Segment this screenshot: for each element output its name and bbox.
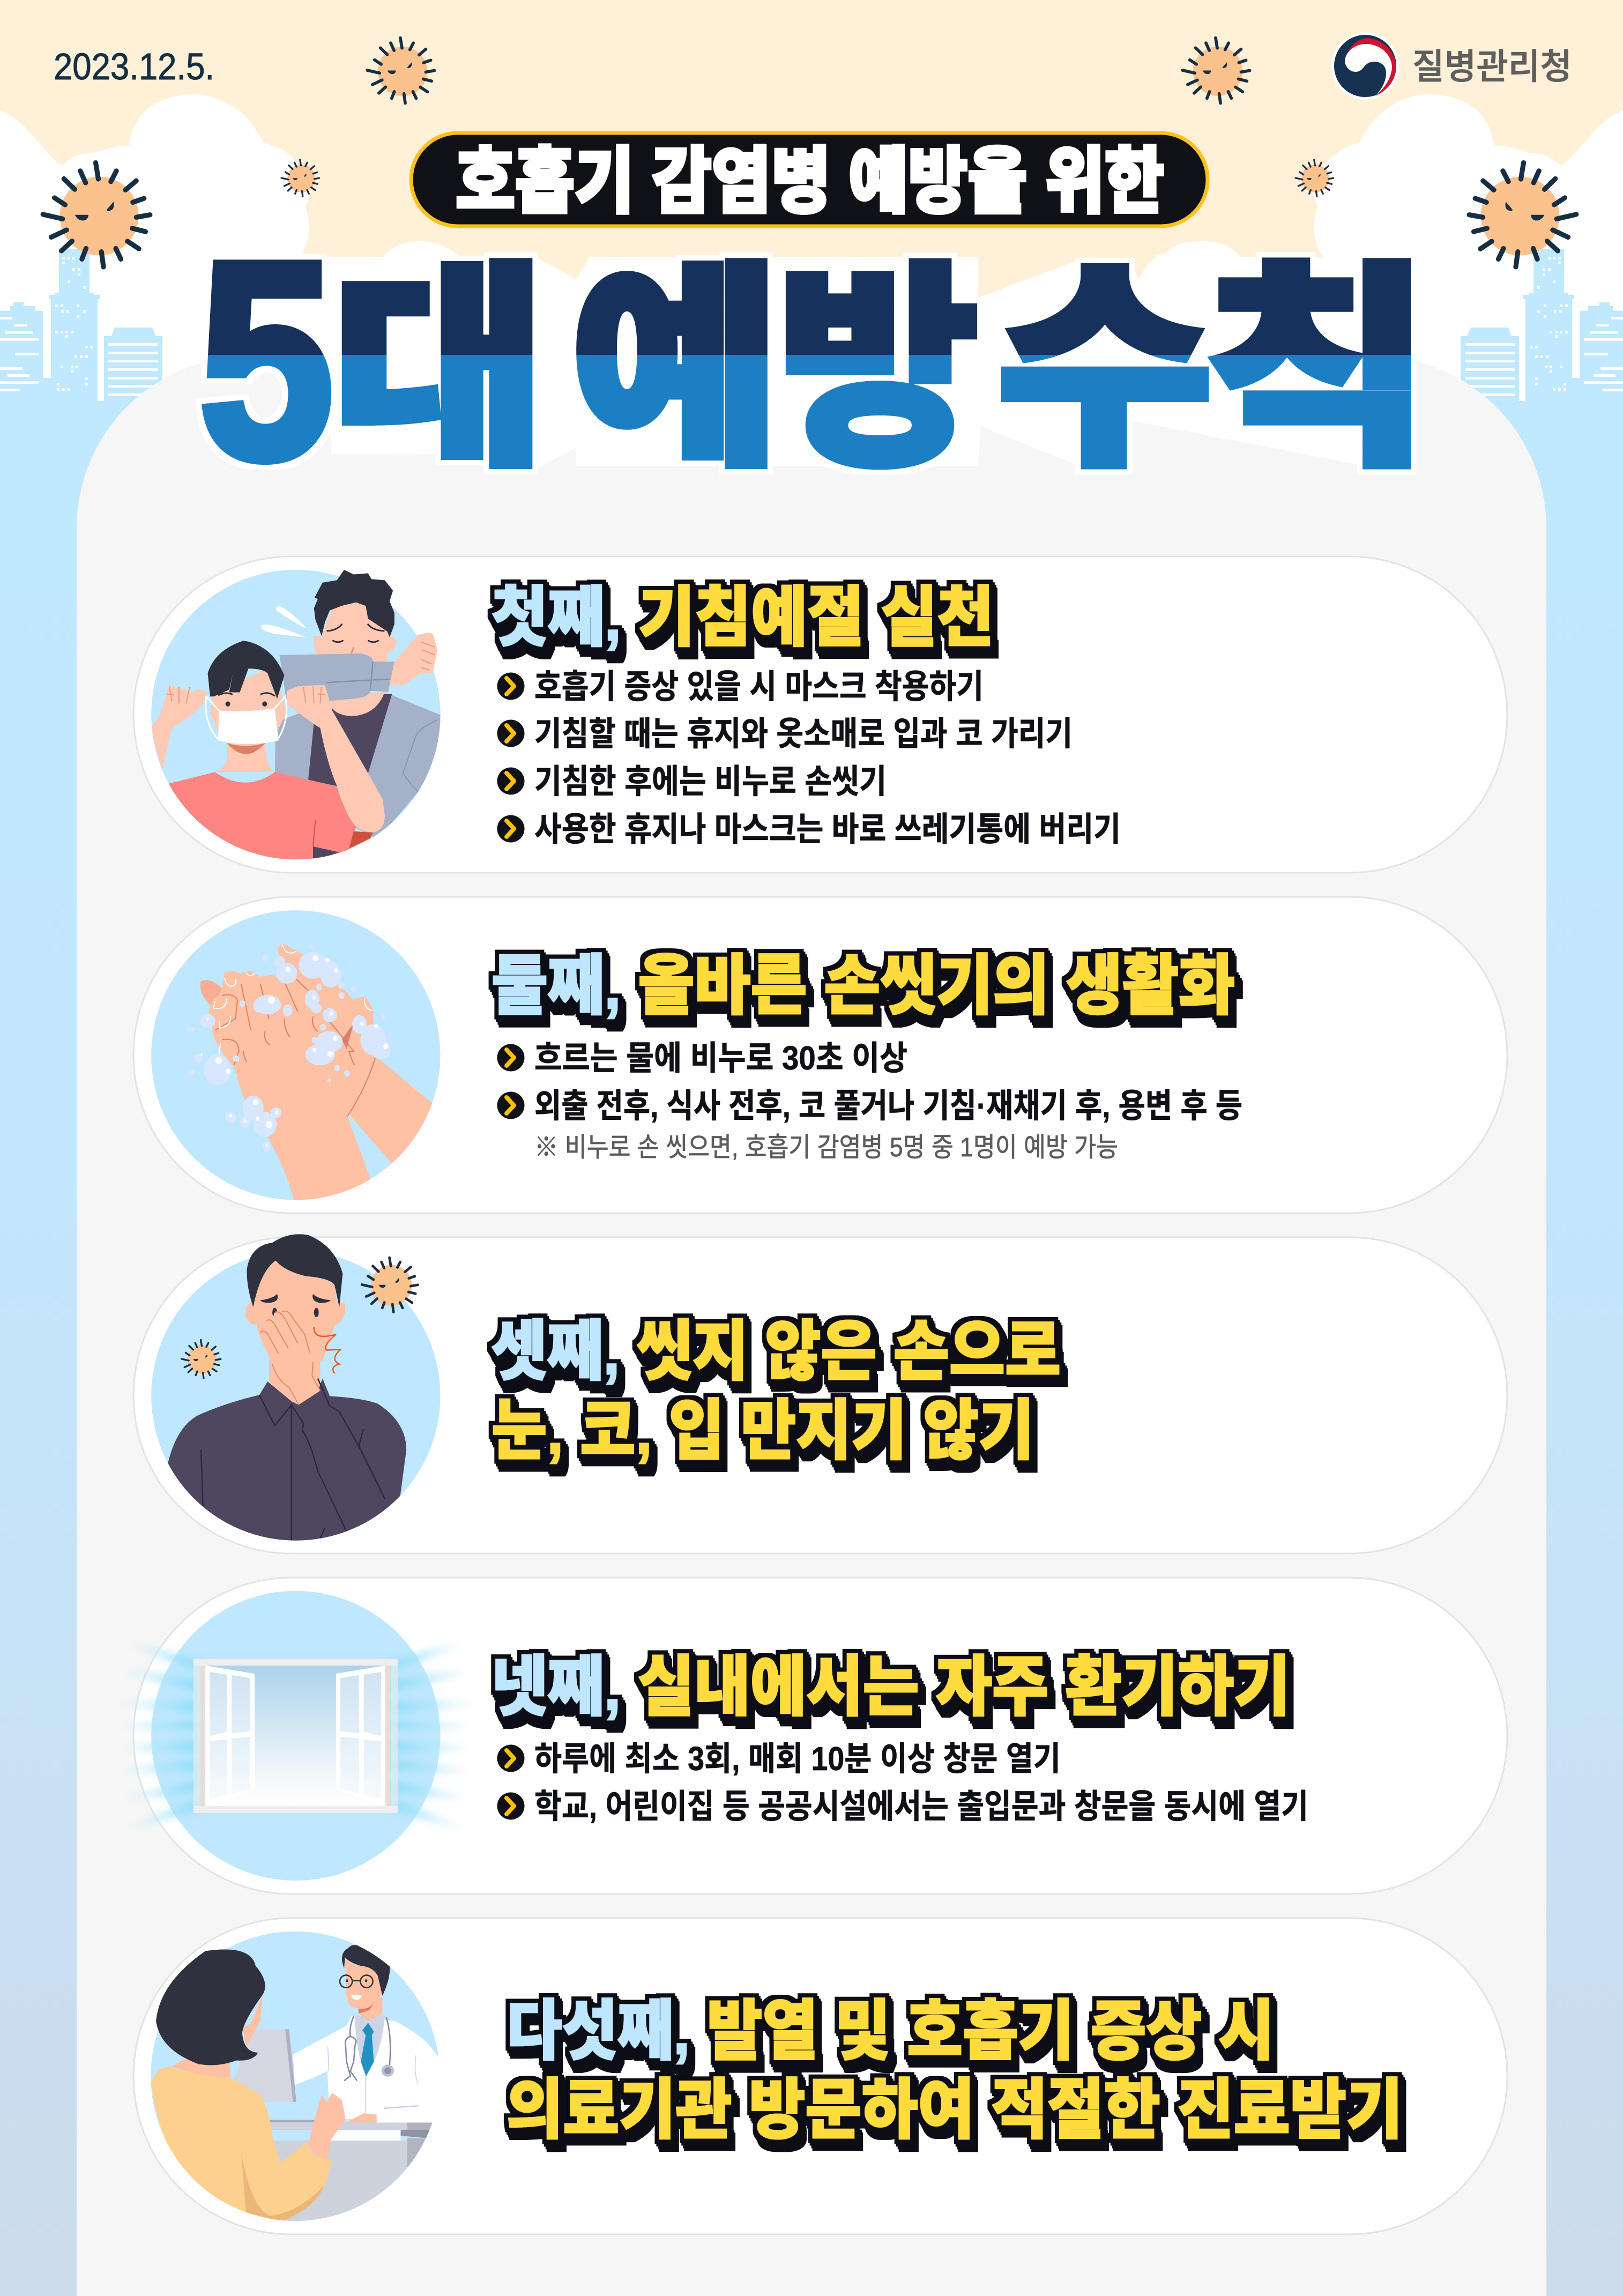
board <box>227 2029 295 2102</box>
heading line 2: 눈, 코, 입 만지기 않기 <box>492 1394 1034 1467</box>
heading: 첫째, 기침예절 실천 <box>492 581 994 654</box>
virus small left <box>281 160 319 196</box>
heading: 둘째, 올바른 손씻기의 생활화 <box>492 949 1235 1022</box>
virus small right <box>1296 160 1333 196</box>
virus top right <box>1182 38 1250 103</box>
agency name: 질병관리청 <box>1412 47 1572 86</box>
bullet list: 호흡기 증상 있을 시 마스크 착용하기 <box>534 668 984 705</box>
panel: second rule <box>133 897 1507 1213</box>
city skyline left <box>0 249 162 407</box>
patient top <box>151 2067 331 2222</box>
doctor <box>293 2016 442 2119</box>
patient arm <box>308 2093 346 2160</box>
bullet list: 기침한 후에는 비누로 손씻기 <box>534 763 887 800</box>
desk <box>270 2122 433 2130</box>
bullet list: 기침할 때는 휴지와 옷소매로 입과 코 가리기 <box>534 716 1073 753</box>
main title: 수 <box>996 248 1213 491</box>
clouds <box>0 94 1623 429</box>
patient hair <box>156 1949 265 2065</box>
sleeve <box>279 653 394 704</box>
main title: 대 <box>332 248 546 491</box>
main title: 예 <box>571 248 780 491</box>
virus left of man <box>182 1340 221 1378</box>
date: 2023.12.5. <box>54 46 214 87</box>
back man head <box>314 603 396 666</box>
bullet list: 하루에 최소 3회, 매회 10분 이상 창문 열기 <box>534 1741 1061 1778</box>
panel: fifth rule <box>133 1918 1507 2234</box>
main title: 방 <box>777 248 979 491</box>
bullet list <box>497 1040 1242 1162</box>
illustration: masks and coughing etiquette <box>150 570 441 861</box>
heading line 1: 셋째, 씻지 않은 손으로 <box>492 1315 1061 1388</box>
patient chair <box>169 2158 224 2205</box>
bullet list <box>497 1741 1308 1825</box>
background sky <box>0 0 1623 482</box>
panel: first rule <box>133 556 1507 873</box>
main panel <box>77 356 1546 2296</box>
left sash <box>205 1666 255 1806</box>
city skyline right <box>1461 249 1623 407</box>
illustration: washing hands <box>151 910 441 1201</box>
illustration: man touching face <box>151 1234 441 1548</box>
virus large right <box>1469 162 1576 267</box>
illustration: doctor and patient <box>151 1931 442 2223</box>
bullet list: 외출 전후, 식사 전후, 코 풀거나 기침·재채기 후, 용변 후 등 <box>534 1088 1242 1125</box>
panel: fourth rule <box>119 1578 1507 1894</box>
fist <box>387 633 437 685</box>
fingers <box>167 686 325 703</box>
bullet list: 사용한 휴지나 마스크는 바로 쓰레기통에 버리기 <box>534 811 1121 848</box>
icon: taegeuk emblem <box>1331 32 1399 100</box>
main title: 칙 <box>1204 248 1431 491</box>
white backing behind title <box>330 354 1372 467</box>
main title <box>199 205 1431 516</box>
heading: 넷째, 실내에서는 자주 환기하기 <box>492 1651 1290 1723</box>
panel: third rule <box>133 1234 1507 1554</box>
heading line 1: 다섯째, 발열 및 호흡기 증상 시 <box>507 1995 1274 2068</box>
bullet list <box>497 668 1121 848</box>
bullet list: 흐르는 물에 비누로 30초 이상 <box>534 1040 907 1077</box>
front man arms <box>150 685 208 771</box>
virus large left <box>43 162 150 267</box>
subtitle pill: 호흡기 감염병 예방을 위한 <box>456 141 1164 222</box>
logo: KDCA <box>1331 32 1572 100</box>
virus right of man <box>362 1258 418 1312</box>
right sash <box>336 1666 385 1806</box>
bullet list: 학교, 어린이집 등 공공시설에서는 출입문과 창문을 동시에 열기 <box>534 1788 1308 1825</box>
virus top left <box>367 38 435 103</box>
heading line 2: 의료기관 방문하여 적절한 진료받기 <box>507 2074 1403 2146</box>
footnote: ※ 비누로 손 씻으면, 호흡기 감염병 5명 중 1명이 예방 가능 <box>534 1132 1118 1162</box>
front man head <box>210 668 287 741</box>
rays <box>119 1640 200 1832</box>
main title: 5 <box>199 205 333 516</box>
front man shirt <box>215 741 275 772</box>
illustration: open window <box>119 1591 472 1881</box>
